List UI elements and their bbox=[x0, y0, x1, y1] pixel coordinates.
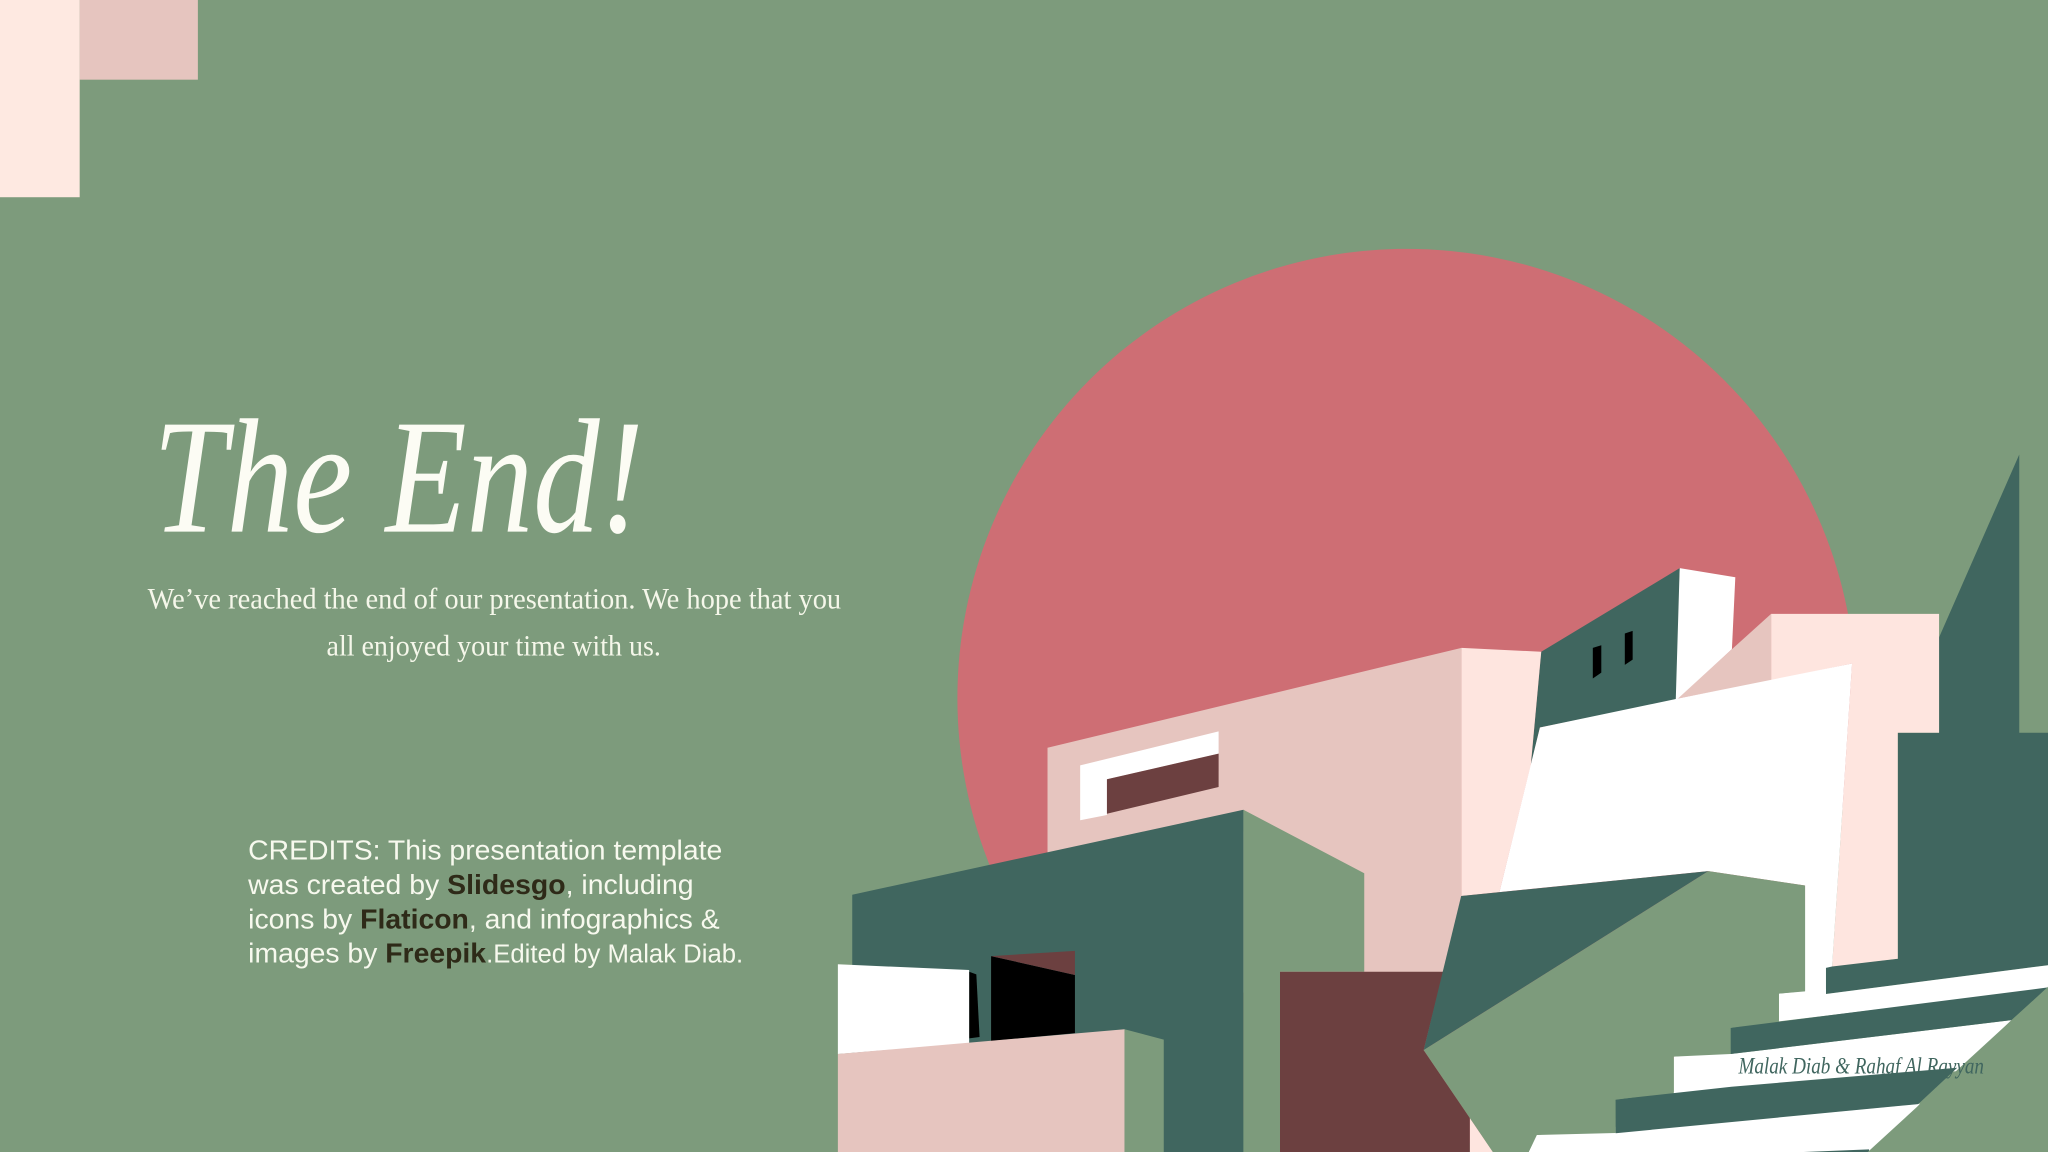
red sun circle bbox=[957, 249, 1856, 1147]
pale rear block bbox=[1771, 614, 1939, 967]
dark wedge bbox=[1424, 871, 1708, 1050]
credits: images by Freepik.Edited by Malak Diab. bbox=[248, 938, 743, 969]
green balcony side bbox=[1125, 1029, 1164, 1152]
pale sliver bbox=[1470, 1118, 1493, 1152]
white central block bbox=[1499, 664, 1852, 995]
building illustration bbox=[838, 455, 2048, 1152]
pale building side bbox=[1462, 648, 1541, 896]
credits bbox=[247, 834, 743, 969]
green wedge block bbox=[1424, 871, 1805, 1152]
doorway bbox=[991, 951, 1075, 1041]
green corner bbox=[1868, 987, 2048, 1152]
credits: was created by Slidesgo, including bbox=[247, 869, 694, 900]
title: The End! bbox=[153, 388, 644, 568]
credits: CREDITS: This presentation template bbox=[248, 834, 722, 865]
dark rooftop tower bbox=[1531, 568, 1680, 765]
dark stair bands bbox=[1616, 987, 2048, 1152]
pink main building bbox=[1048, 648, 1462, 993]
subtitle: all enjoyed your time with us. bbox=[327, 630, 661, 663]
maroon wall bbox=[1280, 972, 1470, 1152]
subtitle: We’ve reached the end of our presentation. We hope that you bbox=[148, 583, 841, 616]
white tower strip bbox=[1673, 568, 1735, 701]
subtitle bbox=[148, 583, 841, 663]
recessed window bbox=[1080, 731, 1219, 820]
pink rear wedge bbox=[1677, 614, 1771, 699]
dark tower at far right bbox=[1826, 455, 2048, 994]
green front building side bbox=[1243, 810, 1364, 1152]
corner decoration bbox=[0, 0, 198, 197]
dark front building bbox=[852, 810, 1243, 1152]
credits: icons by Flaticon, and infographics & bbox=[248, 904, 720, 935]
pink front balcony wall bbox=[838, 1029, 1125, 1152]
rooftop tower windows bbox=[1593, 631, 1633, 679]
author credit: Malak Diab & Rahaf Al Rayyan bbox=[1738, 1054, 1984, 1079]
white stairs bbox=[1529, 965, 2048, 1152]
white balcony bbox=[838, 964, 980, 1054]
